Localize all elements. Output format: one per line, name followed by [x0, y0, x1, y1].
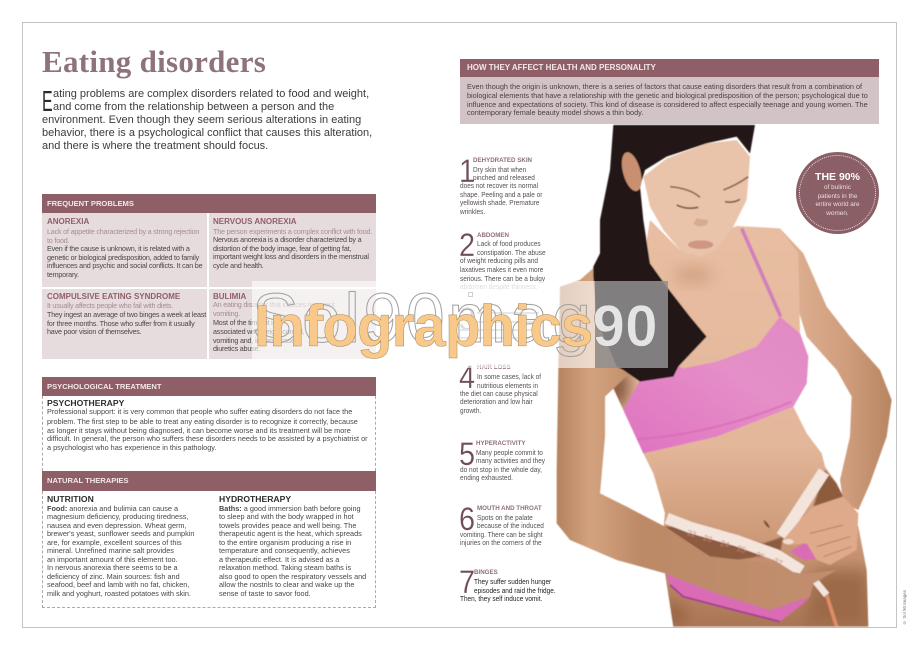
card: anorexia: Lack of appetite characterized by a strong rejection [47, 227, 199, 236]
card: anorexia: to food. [47, 236, 69, 245]
callout: 5 hyperactivity: 5 [459, 436, 475, 472]
card: bulimia: vomiting and, in some cases, [213, 336, 300, 344]
hand [782, 497, 858, 565]
panel: psychological treatment [42, 377, 376, 471]
callout: 7 binges [459, 564, 556, 603]
panel: frequent problems [42, 194, 376, 359]
text: nutrition: are, for example, excellent sources of this [47, 538, 182, 546]
callout: 1 dehydrated skin [459, 153, 542, 216]
callout: 1 dehydrated skin: yellowish shade. Premature [460, 198, 539, 207]
text: hydrotherapy: therapeutic agent is the heat, which spreads [219, 529, 362, 538]
text: nutrition: mineral. Unrefined marine salt provides [47, 546, 174, 555]
text: hydrotherapy: to the entire organism producing a rise in [219, 538, 351, 546]
callout: 5 hyperactivity: do not stop in the whole day, [460, 465, 542, 474]
card: bulimia: BULIMIA [213, 292, 246, 301]
heading: frequent problems [42, 194, 376, 213]
callout: 4 hair loss: In some cases, lack of [477, 372, 541, 381]
text: hydrotherapy: sense of taste to savor food. [219, 588, 311, 598]
text: nutrition: an important amount of this element too. [47, 554, 178, 564]
badge text: women. [826, 210, 849, 217]
heading: how they affect: HOW THEY AFFECT HEALTH AND PERSONALITY [467, 63, 656, 72]
badge text [815, 171, 860, 217]
tape: 25 [736, 544, 748, 555]
card: bulimia: associated with weight control, [213, 327, 304, 336]
intro text: and come from the relationship between a person and the [53, 101, 334, 113]
text: nutrition [47, 494, 194, 598]
callout: 6 mouth and throat: because of the induced [477, 521, 544, 530]
right arm [780, 228, 892, 510]
callout: 2 abdomen: Lack of food produces [477, 239, 541, 248]
card: compulsive eating syndrome: They ingest an average of two binges a week at least [47, 310, 206, 319]
card: nervous anorexia: distortion of the body image, fear of getting fat, [213, 244, 351, 253]
callout: 4 hair loss: growth. [460, 406, 481, 415]
callout: 1 dehydrated skin: shape. Peeling and a pale or [460, 190, 542, 199]
card: nervous anorexia [209, 213, 376, 287]
card: anorexia: ANOREXIA [47, 217, 89, 226]
intro paragraph [467, 82, 868, 117]
text: hydrotherapy: Baths: a good immersion bath before going [219, 504, 361, 512]
text: hydrotherapy: temperature and consequently, achieves [219, 546, 350, 555]
card: nervous anorexia: NERVOUS ANOREXIA [213, 217, 297, 226]
text: nutrition: brewer's yeast, sunflower seeds and pumpkin [47, 529, 194, 538]
callout: 5 hyperactivity: many activities and they [476, 456, 545, 465]
card: compulsive eating syndrome: It usually affects people who fail with diets. [47, 301, 173, 310]
face [643, 140, 750, 257]
callout: 6 mouth and throat: vomiting. There can be slight [460, 530, 543, 539]
text: nutrition: milk and yoghurt, roasted potatoes with skin. [47, 588, 191, 598]
text: psychotherapy: PSYCHOTHERAPY [47, 398, 124, 408]
text: hydrotherapy: relaxation method. Taking steam baths is [219, 563, 351, 572]
text: nutrition: seafood, beef and lamb with no fat, chicken, [47, 580, 189, 589]
tape: 26 [754, 550, 766, 562]
intro paragraph: contemporary female beauty model shows a thin body. [467, 108, 643, 117]
intro text: behavior, there is a psychological conflict that causes this alteration, [42, 127, 372, 139]
left arm [557, 267, 837, 610]
heading: psychological treatment: PSYCHOLOGICAL TREATMENT [47, 382, 161, 391]
heading: psychological treatment [42, 377, 376, 396]
text: hydrotherapy: allow the nostrils to clear and wake up the [219, 580, 354, 589]
callout: 6 mouth and throat: Spots on the palate [477, 513, 533, 522]
torso [605, 220, 868, 627]
watermark light panel [252, 281, 595, 368]
text: hydrotherapy: to sleep and with the body wrapped in hot [219, 512, 354, 521]
callout: 2 abdomen: abdomen despite thinness. [460, 282, 537, 291]
callout: 2 abdomen: constipation. The abuse [477, 248, 546, 257]
text: psychotherapy: Professional support: it is very common that people who suffer eating disorders do not face the [47, 407, 352, 416]
intro text: and there is where the treatment should focus. [42, 140, 268, 152]
callout: 3: 3 [459, 301, 475, 337]
text: psychotherapy: a psychologist who has experience in this pathology. [47, 443, 216, 452]
card: anorexia: Even if the cause is unknown, it is related with a [47, 244, 190, 253]
tape: 22 [686, 528, 698, 540]
panel: how they affect health and personality [460, 59, 879, 124]
title: Eating disorders [42, 44, 266, 79]
text: nutrition: NUTRITION [47, 494, 94, 504]
callout: 2 abdomen [459, 227, 546, 291]
hair [593, 125, 755, 382]
text: hydrotherapy: a therapeutic effect. It is advised as a [219, 554, 339, 564]
tape: 27 [772, 556, 784, 568]
intro text: environment. Even though they seem serious alterations in eating [42, 114, 361, 126]
intro paragraph: biological elements that have a relationship with the genetic and biological predisposition of the person; psychological due to [467, 91, 868, 100]
callout: 6 mouth and throat: 6 [459, 501, 475, 537]
intro paragraph: influence and expectations of society. This kind of disease is considered to affect especially teenage and young women. The [467, 100, 868, 109]
card: compulsive eating syndrome: COMPULSIVE EATING SYNDROME [47, 292, 180, 301]
callout: 6 mouth and throat: injuries on the corners of the [460, 538, 542, 547]
callout: 4 hair loss: nutritious elements in [477, 381, 538, 390]
callout: 1 dehydrated skin: does not recover its normal [460, 181, 538, 190]
text: nutrition: Food: anorexia and bulimia can cause a [47, 504, 178, 512]
callout: 4 hair loss: 4 [459, 359, 475, 395]
card: anorexia [42, 213, 207, 287]
credit: © Sol 90 Images [902, 590, 907, 625]
callout: 4 hair loss: HAIR LOSS [477, 364, 511, 371]
callout: 2 abdomen: of weight reducing pills and [460, 256, 538, 265]
text: psychotherapy: difficult. In general, the person who suffers these disorders needs to be assisted by a psychiatrist or [47, 434, 368, 443]
callout: 7 binges: They suffer sudden hunger [474, 577, 551, 586]
text: hydrotherapy: towels provides peace and well being. The [219, 520, 356, 530]
callout: 7 binges: 7 [459, 564, 475, 600]
dashed side borders [42, 396, 376, 471]
badge text: patients in the [818, 193, 857, 200]
card: bulimia: Most of the times it is [213, 318, 276, 327]
illustration: woman with measuring tape [556, 124, 892, 628]
badge text: THE 90% [815, 171, 860, 183]
card: anorexia: genetic or biological predisposition, added to family [47, 253, 199, 262]
tape: 23 [702, 533, 714, 545]
text: nutrition: deficiency of zinc. Main sources: fish and [47, 572, 180, 580]
text: nutrition: magnesium deficiency, producing tiredness, [47, 512, 188, 521]
ear [618, 150, 645, 193]
intro text [42, 86, 372, 152]
card: anorexia: temporary. [47, 270, 79, 279]
callout: 1 dehydrated skin: pinched and released [473, 173, 535, 182]
callout: 1 dehydrated skin: wrinkles. [460, 207, 485, 216]
text: nutrition: nausea and even depression. Wheat germ, [47, 520, 187, 530]
text: hydrotherapy [219, 494, 366, 598]
callout: 2 abdomen: laxatives makes it even more [460, 265, 543, 274]
card: nervous anorexia: Nervous anorexia is a disorder characterized by a [213, 235, 361, 244]
tape: 24 [719, 539, 731, 550]
badge stitched ring [799, 155, 876, 231]
card: anorexia: influences and psychic and social conflicts. It can be [47, 261, 202, 270]
card: bulimia: vomiting. [213, 309, 240, 318]
callout: 7 binges: episodes and raid the fridge. [474, 586, 556, 595]
callout: 5 hyperactivity [459, 436, 545, 482]
panel: natural therapies [42, 471, 376, 608]
callout: 5 hyperactivity: HYPERACTIVITY [476, 440, 526, 447]
text: hydrotherapy: HYDROTHERAPY [219, 494, 291, 504]
heading: how they affect [460, 59, 879, 77]
heading: natural therapies [42, 471, 376, 491]
card: compulsive eating syndrome: have poor vision of themselves. [47, 327, 141, 336]
text: psychotherapy [47, 398, 368, 452]
callout badge: the 90% [796, 152, 879, 234]
card: nervous anorexia: The person experiments a complex conflict with food. [213, 226, 372, 236]
intro paragraph: Even though the origin is unknown, there is a series of factors that cause eating disorders that result from a combination of [467, 82, 862, 91]
card: bulimia: diuretics abuse. [213, 344, 260, 353]
callout: 7 binges: Then, they self induce vomit. [460, 594, 542, 603]
watermark [252, 281, 668, 368]
card: compulsive eating syndrome: for three months. Those who suffer from it usually [47, 318, 195, 328]
dashed border [42, 491, 376, 608]
badge text: of bulimic [824, 184, 851, 191]
tape [667, 472, 837, 627]
text: psychotherapy: as longer it stays without being diagnosed, it can become worse and its treatment will be more [47, 426, 351, 435]
callout: 4 hair loss [459, 359, 542, 415]
callout: 5 hyperactivity: ending exhausted. [460, 473, 513, 482]
badge text: entire world are [815, 201, 860, 208]
heading: natural therapies: NATURAL THERAPIES [47, 476, 129, 485]
heading: frequent problems: FREQUENT PROBLEMS [47, 199, 134, 208]
callout: 1 dehydrated skin: DEHYDRATED SKIN [473, 157, 532, 164]
watermark orange text: Infographics90 [254, 294, 658, 359]
card: compulsive eating syndrome [42, 289, 207, 359]
text: psychotherapy: problem. The first step to be able to treat any eating disorder is to recognize it correctly, because [47, 417, 358, 426]
callout: 7 binges: BINGES [474, 569, 498, 576]
watermark dark panel [595, 281, 668, 368]
small square marker [468, 292, 473, 297]
callout: 4 hair loss: deterioration and low hair [460, 397, 533, 406]
faded text lines [477, 312, 539, 314]
intro text: ating problems are complex disorders related to food and weight, [53, 88, 369, 100]
callout: 6 mouth and throat: MOUTH AND THROAT [477, 505, 542, 512]
callout: 2 abdomen: serious. There can be a bulgy [460, 274, 545, 283]
card: nervous anorexia: important weight loss and disorders in the menstrual [213, 252, 369, 261]
text: hydrotherapy: also good to open the respiratory vessels and [219, 572, 366, 580]
callout: 6 mouth and throat [459, 501, 544, 547]
callout: 1 dehydrated skin: Dry skin that when [473, 165, 526, 174]
briefs [665, 542, 820, 622]
pink top [623, 228, 808, 453]
callout: 4 hair loss: the diet can cause physical [460, 389, 538, 398]
text: nutrition: In nervous anorexia there seems to be a [47, 563, 178, 572]
callout: 5 hyperactivity: Many people commit to [476, 448, 543, 457]
torso shading [603, 267, 868, 627]
card: bulimia: An eating disorder that induces recurrent [213, 300, 335, 309]
card: nervous anorexia: cycle and health. [213, 261, 264, 270]
card: bulimia [209, 289, 376, 359]
intro text: E [42, 86, 53, 118]
callout: 2 abdomen: 2 [459, 227, 475, 263]
callout: 2 abdomen: ABDOMEN [477, 232, 509, 239]
callout: 1 dehydrated skin: 1 [459, 153, 475, 189]
